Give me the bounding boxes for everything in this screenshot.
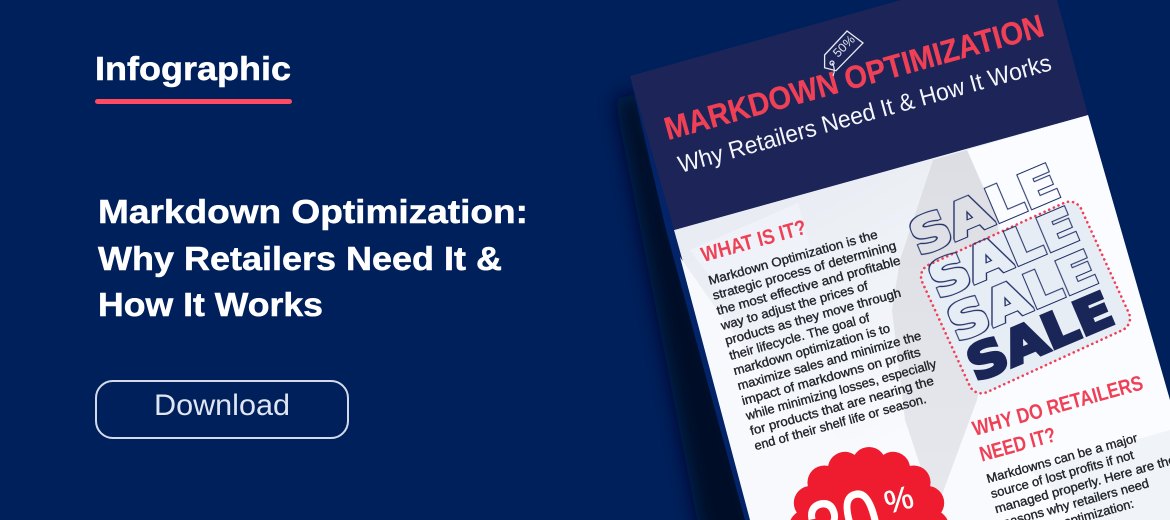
section: what is it: WHAT IS IT?: [699, 216, 809, 267]
section: what is it: products as they move through: [723, 286, 903, 348]
download button: Download: [154, 389, 290, 422]
section: what is it: Markdown Optimization is the: [707, 228, 879, 288]
sale stack: SALE: [902, 155, 1067, 267]
heading: Markdown Optimization:: [98, 193, 528, 230]
background shapes: [680, 115, 1170, 520]
section: why do retailers need it: managed properly. Here are the: [993, 453, 1170, 516]
heading: [98, 193, 528, 323]
section: what is it: maximize sales and minimize the: [736, 329, 923, 393]
sale stack: SALE: [940, 241, 1105, 353]
section: what is it: impact of markdowns on profits: [740, 345, 922, 408]
section: why do retailers need it: source of lost profits if not: [989, 448, 1136, 501]
section: what is it: their lifecycle. The goal of: [728, 311, 872, 363]
preview title: MARKDOWN OPTIMIZATION: [660, 7, 1048, 147]
section: what is it: while minimizing losses, especially: [743, 357, 939, 423]
download button: [96, 381, 348, 438]
section: why do retailers need it: NEED IT?: [977, 424, 1058, 467]
section: why do retailers need it: [970, 369, 1170, 520]
preview header: [630, 0, 1088, 230]
label underline: [95, 99, 292, 104]
badge: 30%: [789, 447, 949, 520]
panel: left text column: [95, 50, 528, 438]
preview title: Why Retailers Need It & How It Works: [675, 50, 1054, 179]
section: what is it: way to adjust the prices of: [718, 279, 870, 333]
section: what is it: strategic process of determining: [711, 239, 898, 303]
section: why do retailers need it: Markdowns can be a major: [985, 431, 1139, 486]
sale stack: SALE: [921, 198, 1086, 310]
icon: price tag: [825, 31, 863, 76]
badge: 30%: %: [880, 478, 917, 520]
heading: How It Works: [98, 286, 323, 323]
section: what is it: for products that are nearing the: [748, 374, 935, 438]
preview body: [674, 115, 1170, 520]
panel: infographic preview: [615, 0, 1170, 520]
sale stack: SALE: [959, 282, 1122, 393]
section: what is it: end of their shelf life or season.: [753, 392, 928, 453]
dotted sale box: [917, 197, 1134, 398]
icon: price tag: 50%: [830, 33, 858, 60]
section: what is it: markdown optimization is to: [732, 321, 892, 378]
section: what is it: [698, 192, 947, 453]
section: what is it: the most effective and profitable: [715, 254, 902, 318]
heading: Why Retailers Need It &: [98, 240, 502, 277]
label: Infographic: Infographic: [95, 50, 291, 87]
sale stack: [902, 155, 1122, 393]
